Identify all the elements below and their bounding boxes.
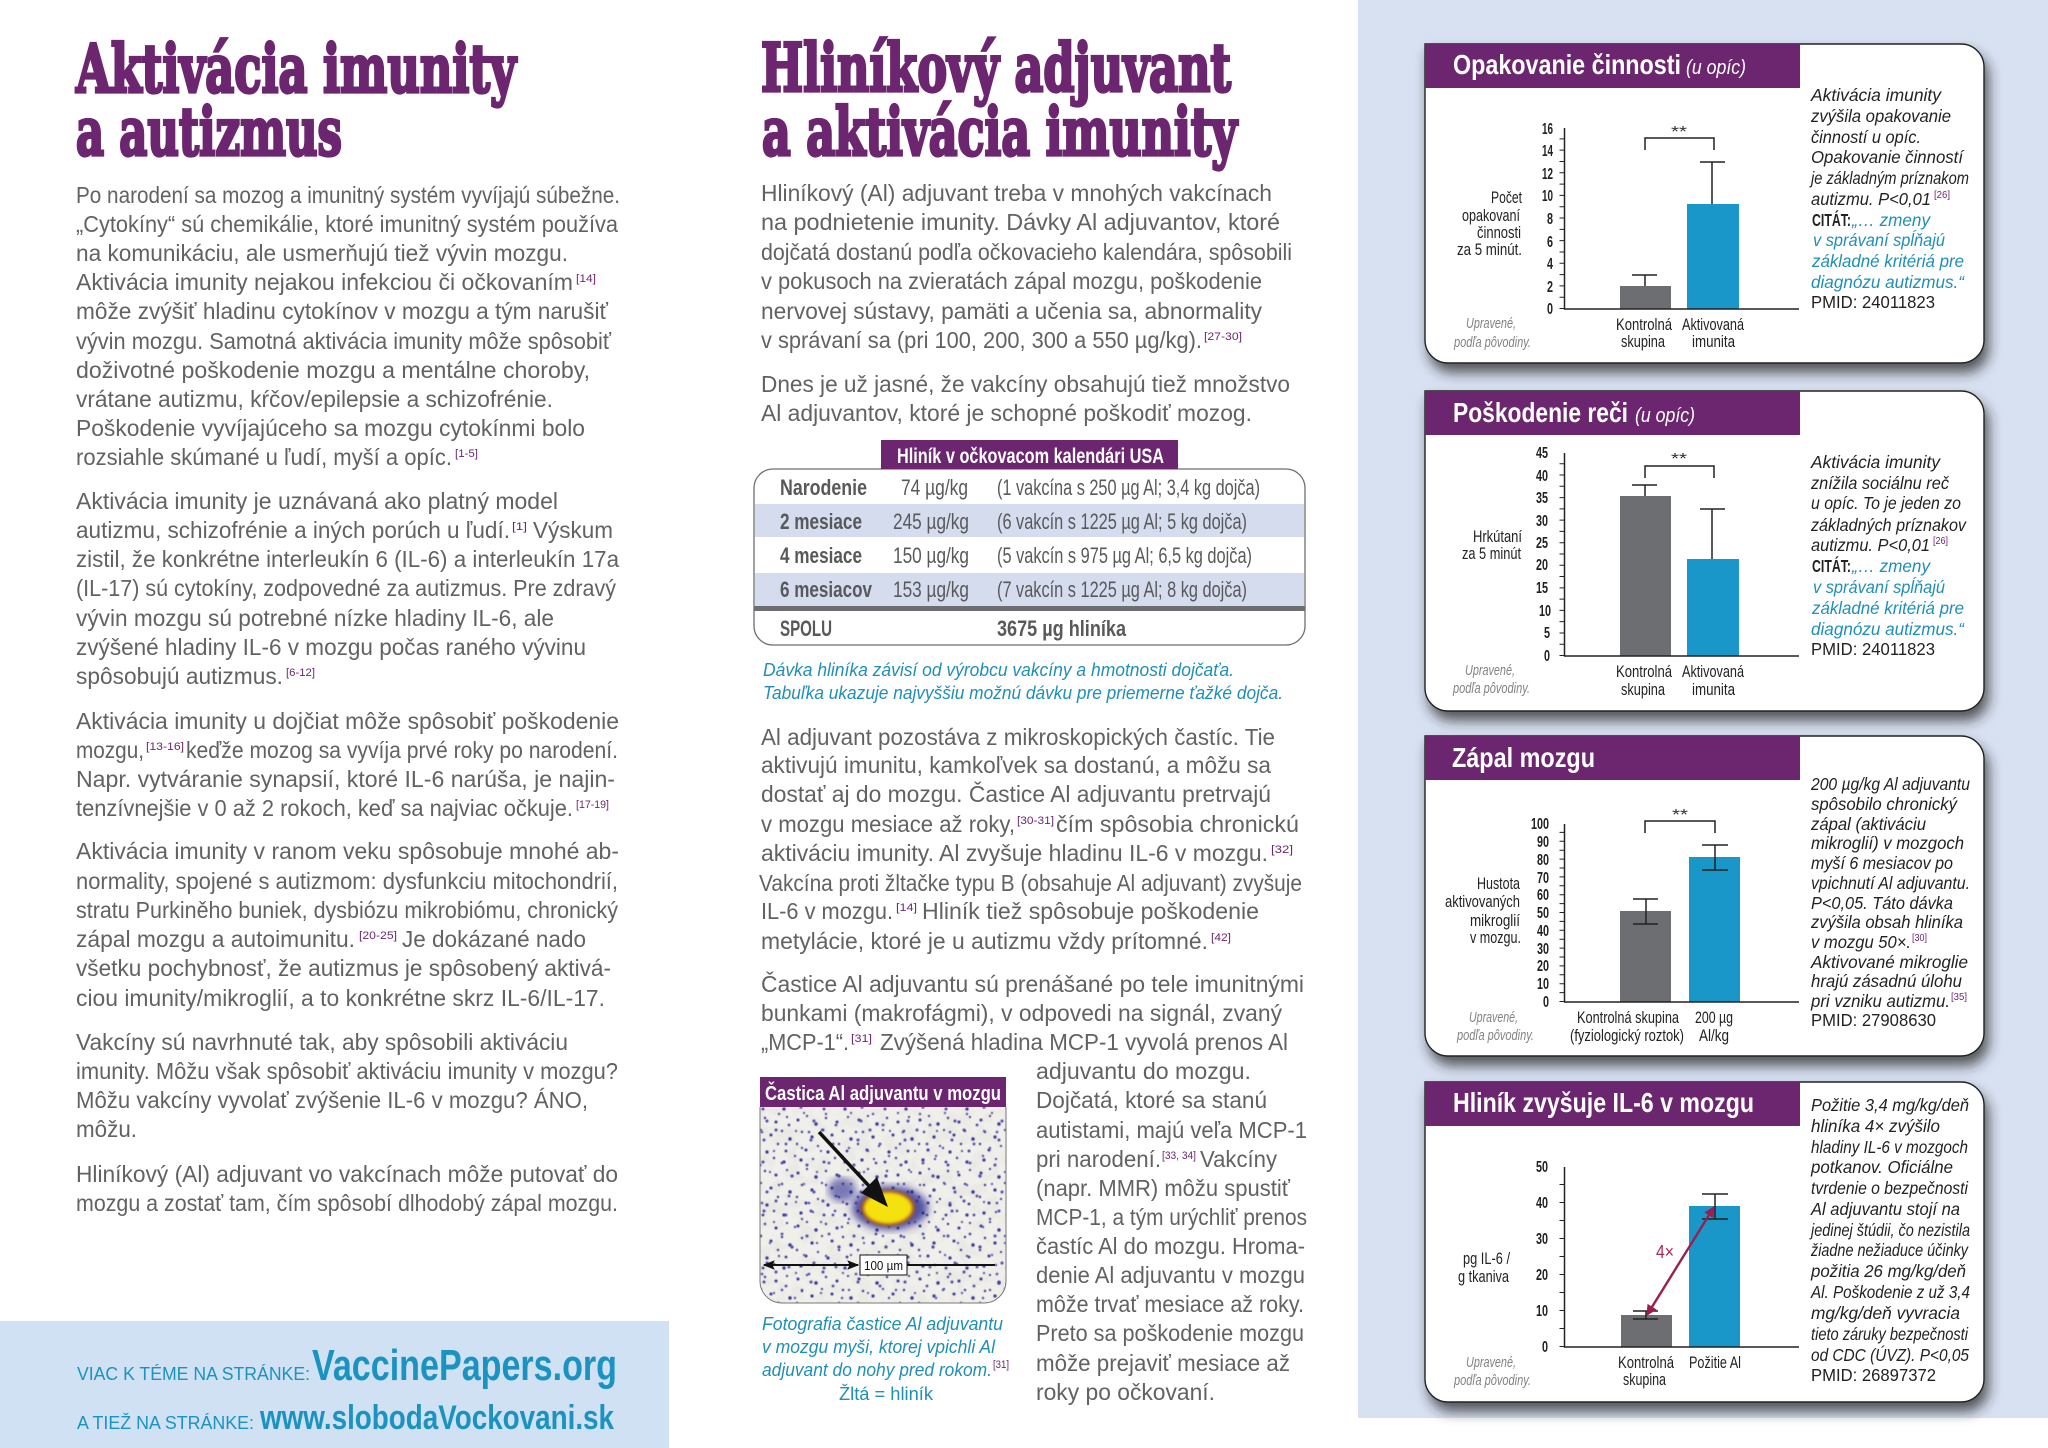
bar chart: (fyziologický roztok) (1570, 1026, 1684, 1045)
card note: v správaní spĺňajú (1813, 576, 1945, 597)
card note: Opakovanie činností (1811, 147, 1965, 167)
card note: [30] (1912, 933, 1927, 944)
text block: middle column lower paragraphs: [30-31] (1017, 815, 1054, 827)
text block: left column body: zápal mozgu a autoimunitu. (76, 926, 355, 952)
photo panel: Častica Al adjuvantu v mozgu (760, 1077, 1006, 1303)
text block: middle column intro (761, 180, 1292, 426)
table: Hliník v očkovacom kalendári USA: 150 µg/kg (893, 543, 969, 568)
text block: left column body: [17-19] (576, 799, 609, 811)
text block: middle column lower paragraphs: v mozgu mesiace až roky, (761, 811, 1015, 837)
text block: left column body: Aktivácia imunity u dojčiat môže spôsobiť poškodenie (76, 708, 619, 734)
arrow: 4× increase: 4× (1656, 1242, 1674, 1262)
card note: „… zmeny (1851, 210, 1931, 230)
text block: middle column lower paragraphs: Vakcína proti žltačke typu B (obsahuje Al adjuvant) zvyšuje (759, 870, 1302, 896)
card note: základné kritériá pre (1811, 251, 1964, 271)
text block: left column body: zistil, že konkrétne interleukín 6 (IL-6) a interleukín 17a (76, 546, 619, 572)
photo panel: Častica Al adjuvantu v mozgu: Častica Al adjuvantu v mozgu (765, 1081, 1001, 1105)
bar chart: imunita (1692, 332, 1735, 351)
card note: Požitie 3,4 mg/kg/deň (1811, 1095, 1969, 1115)
bar chart: 40 (1536, 1195, 1548, 1212)
card note: myší 6 mesiacov po (1811, 853, 1953, 873)
bar chart: 45 (1536, 445, 1548, 462)
bar chart (1453, 1159, 1799, 1389)
card note: [26] (1934, 190, 1950, 201)
text block: middle column lower paragraphs: autistami, majú veľa MCP-1 (1036, 1117, 1307, 1143)
bar chart: 0 (1543, 994, 1549, 1011)
table caption: Tabuľka ukazuje najvyššiu možnú dávku pre priemerne ťažké dojča. (763, 682, 1283, 703)
card note: zvýšila obsah hliníka (1810, 912, 1963, 932)
card: Zápal mozgu (1425, 736, 1984, 1056)
bar chart: 30 (1536, 1231, 1548, 1248)
title: Aktivácia imunity a autizmus: a autizmus (76, 93, 342, 171)
text block: middle column intro: v pokusoch na zvieratách zápal mozgu, poškodenie (761, 268, 1262, 294)
card note: hliníka 4× zvýšilo (1811, 1116, 1940, 1136)
card note: PMID: 26897372 (1811, 1365, 1936, 1385)
text block: middle column lower paragraphs: dostať aj do mozgu. Častice Al adjuvantu pretrvajú (761, 780, 1271, 807)
text block: middle column intro: Al adjuvantov, ktoré je schopné poškodiť mozog. (761, 400, 1252, 426)
card header: Zápal mozgu (1452, 742, 1595, 773)
text block: left column body: vývin mozgu. Samotná aktivácia imunity môže spôsobiť (76, 328, 611, 354)
table: Hliník v očkovacom kalendári USA: 153 µg/kg (893, 577, 969, 602)
text block: left column body: môže zvýšiť hladinu cytokínov v mozgu a tým narušiť (76, 298, 608, 324)
text block: left column body: mozgu a zostať tam, čím spôsobí dlhodobý zápal mozgu. (76, 1190, 618, 1216)
card note: znížila sociálnu reč (1810, 473, 1949, 493)
text block: left column body: Je dokázané nado (402, 926, 586, 952)
table: Hliník v očkovacom kalendári USA: 6 mesiacov (780, 577, 873, 602)
bar chart: Aktivovaná (1682, 315, 1744, 334)
text block: left column body: autizmu, schizofrénie a iných porúch u ľudí. (76, 517, 510, 543)
text block: middle column lower paragraphs: [32] (1271, 844, 1293, 856)
text block: middle column lower paragraphs: Preto sa poškodenie mozgu (1036, 1320, 1304, 1346)
bar chart: 0 (1544, 648, 1550, 665)
bar chart: 30 (1536, 513, 1548, 530)
text block: middle column lower paragraphs: [33, 34] (1162, 1150, 1196, 1162)
table: Hliník v očkovacom kalendári USA: (1 vakcína s 250 µg Al; 3,4 kg dojča) (997, 475, 1260, 500)
bar chart: 10 (1539, 603, 1551, 620)
title: Hliníkový adjuvant a aktivácia imunity: a aktivácia imunity (762, 93, 1238, 171)
text block: left column body (76, 182, 620, 1216)
text block: middle column lower paragraphs: Zvýšená hladina MCP-1 vyvolá prenos Al (880, 1029, 1288, 1055)
bar chart: 40 (1536, 468, 1548, 485)
bar chart: 6 (1547, 234, 1553, 251)
bar chart: činnosti (1477, 223, 1521, 242)
bar chart: skupina (1621, 680, 1665, 699)
bar chart: 50 (1536, 1159, 1548, 1176)
text block: left column body: keďže mozog sa vyvíja prvé roky po narodení. (186, 737, 618, 763)
card note: P<0,05. Táto dávka (1811, 893, 1953, 913)
card header: Hliník zvyšuje IL-6 v mozgu (1453, 1087, 1754, 1118)
footer banner: website links: A TIEŽ NA STRÁNKE: (77, 1412, 254, 1433)
bar chart: 35 (1536, 490, 1548, 507)
card note: požitia 26 mg/kg/deň (1810, 1261, 1966, 1281)
card note: CITÁT: (1812, 555, 1851, 576)
card note: Al adjuvantu stojí na (1810, 1199, 1960, 1219)
text block: left column body: [6-12] (286, 667, 315, 679)
text block: middle column lower paragraphs: čím spôsobia chronickú (1056, 811, 1299, 837)
bar chart: 8 (1547, 211, 1553, 228)
text block: middle column lower paragraphs: (napr. MMR) môžu spustiť (1036, 1175, 1290, 1201)
table: Hliník v očkovacom kalendári USA (754, 440, 1305, 645)
text block: middle column lower paragraphs: Častice Al adjuvantu sú prenášané po tele imunitnými (761, 970, 1304, 997)
text block: left column body: Môžu vakcíny vyvolať zvýšenie IL-6 v mozgu? ÁNO, (76, 1087, 588, 1113)
text block: middle column lower paragraphs: môže prejaviť mesiace až (1036, 1350, 1290, 1376)
text block: left column body: môžu. (76, 1116, 137, 1142)
card note: [35] (1951, 992, 1967, 1003)
photo panel: Častica Al adjuvantu v mozgu: 100 µm (864, 1258, 903, 1273)
text block: left column body: na komunikáciu, ale usmerňujú tiež vývin mozgu. (76, 240, 568, 266)
bar chart: 50 (1537, 905, 1549, 922)
text block: middle column intro: Dnes je už jasné, že vakcíny obsahujú tiež množstvo (761, 371, 1290, 397)
bar chart: 100 (1531, 816, 1549, 833)
card note: jedinej štúdii, čo nezistila (1809, 1220, 1970, 1240)
text block: left column body: mozgu, (76, 737, 144, 763)
card note: činností u opíc. (1811, 127, 1921, 147)
text block: middle column lower paragraphs: Hliník tiež spôsobuje poškodenie (922, 898, 1259, 924)
text block: left column body: stratu Purkiněho buniek, dysbiózu mikrobiómu, chronický (76, 897, 618, 923)
bar chart: 90 (1537, 834, 1549, 851)
table: Hliník v očkovacom kalendári USA: Narodenie (780, 475, 867, 500)
card header (1425, 1082, 1800, 1126)
bar chart: 10 (1537, 976, 1549, 993)
bar chart: 15 (1536, 580, 1548, 597)
footer banner: website links: VIAC K TÉME NA STRÁNKE: (77, 1363, 310, 1384)
bar chart: 14 (1542, 143, 1553, 160)
bar chart: Upravené, (1466, 315, 1516, 332)
text block: left column body: [13-16] (146, 741, 184, 753)
card: Poškodenie reči (1425, 391, 1984, 711)
bar chart: Kontrolná (1616, 662, 1672, 681)
bar chart: skupina (1623, 1370, 1666, 1389)
card note: mg/kg/deň vyvracia (1811, 1303, 1960, 1323)
photo caption: v mozgu myši, ktorej vpichli Al (762, 1336, 996, 1357)
text block: left column body: spôsobujú autizmus. (76, 663, 283, 689)
card header: Opakovanie činnosti (1453, 49, 1681, 80)
text block: middle column lower paragraphs: „MCP-1“. (761, 1029, 849, 1055)
bar chart: 16 (1542, 121, 1553, 138)
text block: middle column lower paragraphs: [14] (896, 902, 917, 914)
card header (1425, 391, 1800, 435)
bar chart: opakovaní (1462, 206, 1520, 225)
photo caption (762, 1313, 1009, 1404)
bar chart: Kontrolná (1616, 315, 1672, 334)
card note: v správaní spĺňajú (1813, 229, 1945, 250)
card note: „… zmeny (1851, 556, 1931, 576)
card note: diagnózu autizmus.“ (1811, 272, 1965, 292)
bar chart: 60 (1537, 887, 1549, 904)
card note: PMID: 24011823 (1811, 639, 1935, 659)
card note (1809, 1095, 1970, 1385)
card note: tieto záruky bezpečnosti (1811, 1324, 1969, 1344)
card note: Aktivácia imunity (1810, 452, 1941, 472)
text block: left column body: [20-25] (359, 930, 397, 942)
table caption: Dávka hliníka závisí od výrobcu vakcíny a hmotnosti dojčaťa. (763, 659, 1234, 680)
card note (1810, 774, 1970, 1030)
text block: left column body: vrátane autizmu, kŕčov/epilepsie a schizofrénie. (76, 386, 553, 412)
bar chart: 20 (1536, 557, 1548, 574)
table: Hliník v očkovacom kalendári USA: Hliník v očkovacom kalendári USA (897, 445, 1164, 468)
bar chart: podľa pôvodiny. (1456, 1027, 1534, 1044)
card note: [26] (1933, 536, 1948, 547)
text block: middle column lower paragraphs: MCP-1, a tým urýchliť prenos (1036, 1204, 1307, 1230)
text block: left column body: [1] (512, 521, 527, 533)
card note: mikroglií) v mozgoch (1811, 833, 1964, 853)
bar chart: skupina (1621, 332, 1665, 351)
text block: middle column lower paragraphs: metylácie, ktoré je u autizmu vždy prítomné. (761, 928, 1208, 954)
text block: middle column lower paragraphs: Al adjuvant pozostáva z mikroskopických častíc. Tie (761, 724, 1275, 750)
text block: left column body: Vakcíny sú navrhnuté tak, aby spôsobili aktiváciu (76, 1029, 568, 1055)
text block: middle column lower paragraphs: [31] (851, 1033, 872, 1045)
text block: middle column intro: v správaní sa (pri 100, 200, 300 a 550 µg/kg). (761, 327, 1202, 353)
text block: left column body: imunity. Môžu však spôsobiť aktiváciu imunity v mozgu? (76, 1058, 618, 1084)
card note: Aktivované mikroglie (1810, 952, 1968, 972)
bar chart: ** (1671, 451, 1687, 468)
text block: middle column lower paragraphs: Vakcíny (1200, 1146, 1277, 1172)
text block: left column body: Po narodení sa mozog a imunitný systém vyvíjajú súbežne. (76, 182, 620, 208)
text block: middle column lower paragraphs: denie Al adjuvantu v mozgu (1036, 1262, 1305, 1288)
photo caption: [31] (993, 1359, 1009, 1371)
text block: middle column lower paragraphs: môže trvať mesiace až roky. (1036, 1291, 1304, 1317)
bar chart: Kontrolná (1618, 1353, 1674, 1372)
card: Hliník zvyšuje IL-6 v mozgu (1425, 1082, 1984, 1402)
card note: pri vzniku autizmu. (1810, 991, 1950, 1011)
text block: left column body: Aktivácia imunity v ranom veku spôsobuje mnohé ab- (76, 838, 619, 864)
bar chart: Hrkútaní (1473, 527, 1522, 546)
bar chart (1453, 121, 1799, 351)
bar chart: za 5 minút. (1457, 240, 1522, 259)
bar chart: ** (1672, 807, 1688, 824)
text block: left column body: [1-5] (455, 448, 478, 460)
table: Hliník v očkovacom kalendári USA: (5 vakcín s 975 µg Al; 6,5 kg dojča) (997, 543, 1252, 568)
text block: left column body: Poškodenie vyvíjajúceho sa mozgu cytokínmi bolo (76, 415, 585, 441)
bar chart: 2 (1547, 279, 1553, 296)
text block: left column body: (IL-17) sú cytokíny, zodpovedné za autizmus. Pre zdravý (76, 575, 616, 601)
card note: potkanov. Oficiálne (1810, 1157, 1953, 1177)
card header (1425, 736, 1800, 780)
title: Hliníkový adjuvant a aktivácia imunity: Hliníkový adjuvant (761, 29, 1231, 107)
bar chart: v mozgu. (1470, 928, 1521, 947)
bar chart: 12 (1542, 166, 1553, 183)
table: Hliník v očkovacom kalendári USA: 4 mesiace (780, 543, 862, 568)
text block: left column body: tenzívnejšie v 0 až 2 rokoch, keď sa najviac očkuje. (76, 795, 573, 821)
footer banner: website links: www.slobodaVockovani.sk (259, 1399, 614, 1437)
text block: left column body: Aktivácia imunity je uznávaná ako platný model (76, 488, 558, 514)
card note: tvrdenie o bezpečnosti (1811, 1178, 1969, 1198)
card note: autizmu. P<0,01 (1811, 189, 1931, 209)
bar chart: podľa pôvodiny. (1453, 1372, 1531, 1389)
card note: PMID: 27908630 (1811, 1010, 1936, 1030)
title: Aktivácia imunity a autizmus (75, 30, 517, 171)
card header: Poškodenie reči (1453, 397, 1628, 428)
photo caption: Fotografia častice Al adjuvantu (762, 1313, 1003, 1334)
bar chart: 80 (1537, 852, 1549, 869)
bar chart: Požitie Al (1689, 1353, 1741, 1372)
table: Hliník v očkovacom kalendári USA: 3675 µg hliníka (997, 616, 1127, 641)
bar chart: za 5 minút (1462, 544, 1521, 563)
bar chart: 200 µg (1695, 1008, 1733, 1027)
card: Opakovanie činnosti (1425, 44, 1984, 363)
bar chart: mikroglií (1470, 911, 1520, 930)
bar chart: Upravené, (1466, 1354, 1516, 1371)
table: Hliník v očkovacom kalendári USA: 74 µg/kg (901, 475, 968, 500)
text block: left column body: Aktivácia imunity nejakou infekciou či očkovaním (76, 269, 573, 295)
bar chart: 10 (1536, 1303, 1548, 1320)
bar chart: 0 (1547, 301, 1553, 318)
table: Hliník v očkovacom kalendári USA: 245 µg/kg (893, 509, 969, 534)
text block: left column body: [14] (576, 273, 596, 285)
text block: left column body: doživotné poškodenie mozgu a mentálne choroby, (76, 357, 590, 383)
bar chart: podľa pôvodiny. (1453, 334, 1531, 351)
bar chart (1452, 445, 1799, 699)
photo caption: Žltá = hliník (839, 1383, 934, 1404)
table caption (763, 659, 1283, 703)
table: Hliník v očkovacom kalendári USA: 2 mesiace (780, 509, 862, 534)
photo caption: adjuvant do nohy pred rokom. (762, 1359, 992, 1380)
card note: Aktivácia imunity (1810, 85, 1942, 105)
bar chart: Počet (1491, 188, 1522, 207)
bar chart: imunita (1692, 680, 1735, 699)
bar chart: 70 (1537, 870, 1549, 887)
text block: left column body: Napr. vytváranie synapsií, ktoré IL-6 narúša, je najin- (76, 766, 615, 792)
table: Hliník v očkovacom kalendári USA: (6 vakcín s 1225 µg Al; 5 kg dojča) (997, 509, 1247, 534)
text block: middle column intro: Hliníkový (Al) adjuvant treba v mnohých vakcínach (761, 180, 1272, 206)
text block: middle column lower paragraphs: pri narodení. (1036, 1146, 1161, 1172)
card note: autizmu. P<0,01 (1811, 535, 1930, 555)
card note: 200 µg/kg Al adjuvantu (1810, 774, 1970, 794)
text block: middle column lower paragraphs: [42] (1211, 932, 1231, 944)
text block: middle column lower paragraphs (759, 724, 1307, 1405)
text block: middle column lower paragraphs: častíc Al do mozgu. Hroma- (1036, 1233, 1305, 1259)
bar chart: Upravené, (1465, 662, 1515, 679)
card note: zápal (aktiváciu (1810, 814, 1926, 834)
bar chart: 5 (1544, 625, 1550, 642)
bar chart: 4 (1547, 256, 1553, 273)
text block: left column body: rozsiahle skúmané u ľudí, myší a opíc. (76, 444, 452, 470)
text block: middle column lower paragraphs: Dojčatá, ktoré sa stanú (1036, 1087, 1267, 1113)
bar chart: Upravené, (1469, 1009, 1518, 1026)
card note: žiadne nežiaduce účinky (1810, 1240, 1969, 1260)
bar chart: Kontrolná skupina (1577, 1008, 1679, 1027)
card note: od CDC (ÚVZ). P<0,05 (1811, 1344, 1969, 1365)
arrow: 4× increase (1647, 1207, 1714, 1315)
card note: CITÁT: (1812, 209, 1851, 230)
bar chart: 20 (1536, 1267, 1548, 1284)
bar chart: 0 (1542, 1339, 1548, 1356)
card header: (u opíc) (1635, 405, 1695, 427)
card note: hrajú zásadnú úlohu (1811, 971, 1962, 991)
card header (1425, 44, 1800, 88)
card note: zvýšila opakovanie (1810, 106, 1951, 126)
card note (1809, 85, 1969, 312)
panel: right column background (1358, 0, 2048, 1418)
text block: middle column intro: nervovej sústavy, pamäti a učenia sa, abnormality (761, 298, 1262, 324)
card note: PMID: 24011823 (1811, 292, 1935, 312)
text block: left column body: Hliníkový (Al) adjuvant vo vakcínach môže putovať do (76, 1161, 618, 1187)
text block: left column body: Výskum (533, 517, 613, 543)
bar chart: podľa pôvodiny. (1452, 680, 1530, 697)
bar chart: aktivovaných (1445, 892, 1520, 911)
title: Hliníkový adjuvant a aktivácia imunity (761, 29, 1238, 171)
text block: left column body: vývin mozgu sú potrebné nízke hladiny IL-6, ale (76, 605, 554, 631)
text block: middle column lower paragraphs: adjuvantu do mozgu. (1036, 1058, 1251, 1084)
card note: diagnózu autizmus.“ (1811, 619, 1965, 639)
text block: left column body: všetku pochybnosť, že autizmus je spôsobený aktivá- (76, 955, 611, 981)
bar chart: Hustota (1477, 874, 1520, 893)
table: Hliník v očkovacom kalendári USA: SPOLU (780, 616, 832, 641)
card note: je základným príznakom (1809, 168, 1969, 188)
bar chart: g tkaniva (1458, 1267, 1509, 1286)
card note: vpichnutí Al adjuvantu. (1811, 873, 1970, 893)
bar chart: 25 (1536, 535, 1548, 552)
text block: middle column lower paragraphs: aktiváciu imunity. Al zvyšuje hladinu IL-6 v mozgu. (761, 840, 1268, 866)
card note (1810, 452, 1967, 659)
text block: left column body: zvýšené hladiny IL-6 v mozgu počas raného vývinu (76, 634, 586, 660)
table: Hliník v očkovacom kalendári USA: (7 vakcín s 1225 µg Al; 8 kg dojča) (997, 577, 1247, 602)
bar chart: 20 (1537, 958, 1549, 975)
card note: spôsobilo chronický (1811, 794, 1958, 814)
bar chart: 30 (1537, 941, 1549, 958)
text block: left column body: normality, spojené s autizmom: dysfunkciu mitochondrií, (76, 868, 618, 894)
card note: u opíc. To je jeden zo (1811, 493, 1961, 513)
text block: middle column lower paragraphs: bunkami (makrofágmi), v odpovedi na signál, zvaný (761, 1000, 1282, 1026)
title: Aktivácia imunity a autizmus: Aktivácia imunity (75, 30, 517, 108)
card note: základné kritériá pre (1811, 598, 1964, 618)
bar chart: Aktivovaná (1682, 662, 1744, 681)
footer banner: website links: VaccinePapers.org (312, 1341, 617, 1390)
card note: hladiny IL-6 v mozgoch (1811, 1137, 1968, 1157)
text block: middle column intro: dojčatá dostanú podľa očkovacieho kalendára, spôsobili (761, 239, 1292, 265)
bar chart: pg IL-6 / (1463, 1249, 1510, 1268)
text block: left column body: „Cytokíny“ sú chemikálie, ktoré imunitný systém používa (76, 211, 618, 237)
text block: middle column lower paragraphs: roky po očkovaní. (1036, 1379, 1215, 1405)
card header: (u opíc) (1686, 57, 1746, 79)
text block: middle column lower paragraphs: aktivujú imunitu, kamkoľvek sa dostanú, a môžu sa (761, 752, 1271, 778)
text block: left column body: ciou imunity/mikroglií, a to konkrétne skrz IL-6/IL-17. (76, 985, 605, 1011)
bar chart: Al/kg (1699, 1026, 1729, 1045)
text block: middle column intro: na podnietenie imunity. Dávky Al adjuvantov, ktoré (761, 209, 1280, 235)
card note: základných príznakov (1810, 515, 1967, 535)
bar chart: 40 (1537, 923, 1549, 940)
card note: Al. Poškodenie z už 3,4 (1810, 1282, 1970, 1302)
bar chart: ** (1671, 124, 1687, 141)
bar chart (1445, 807, 1799, 1045)
text block: middle column lower paragraphs: IL-6 v mozgu. (761, 898, 893, 924)
bar chart: 10 (1542, 188, 1553, 205)
card note: v mozgu 50×. (1811, 932, 1911, 952)
text block: middle column intro: [27-30] (1204, 331, 1242, 343)
footer banner: website links (0, 1321, 669, 1448)
